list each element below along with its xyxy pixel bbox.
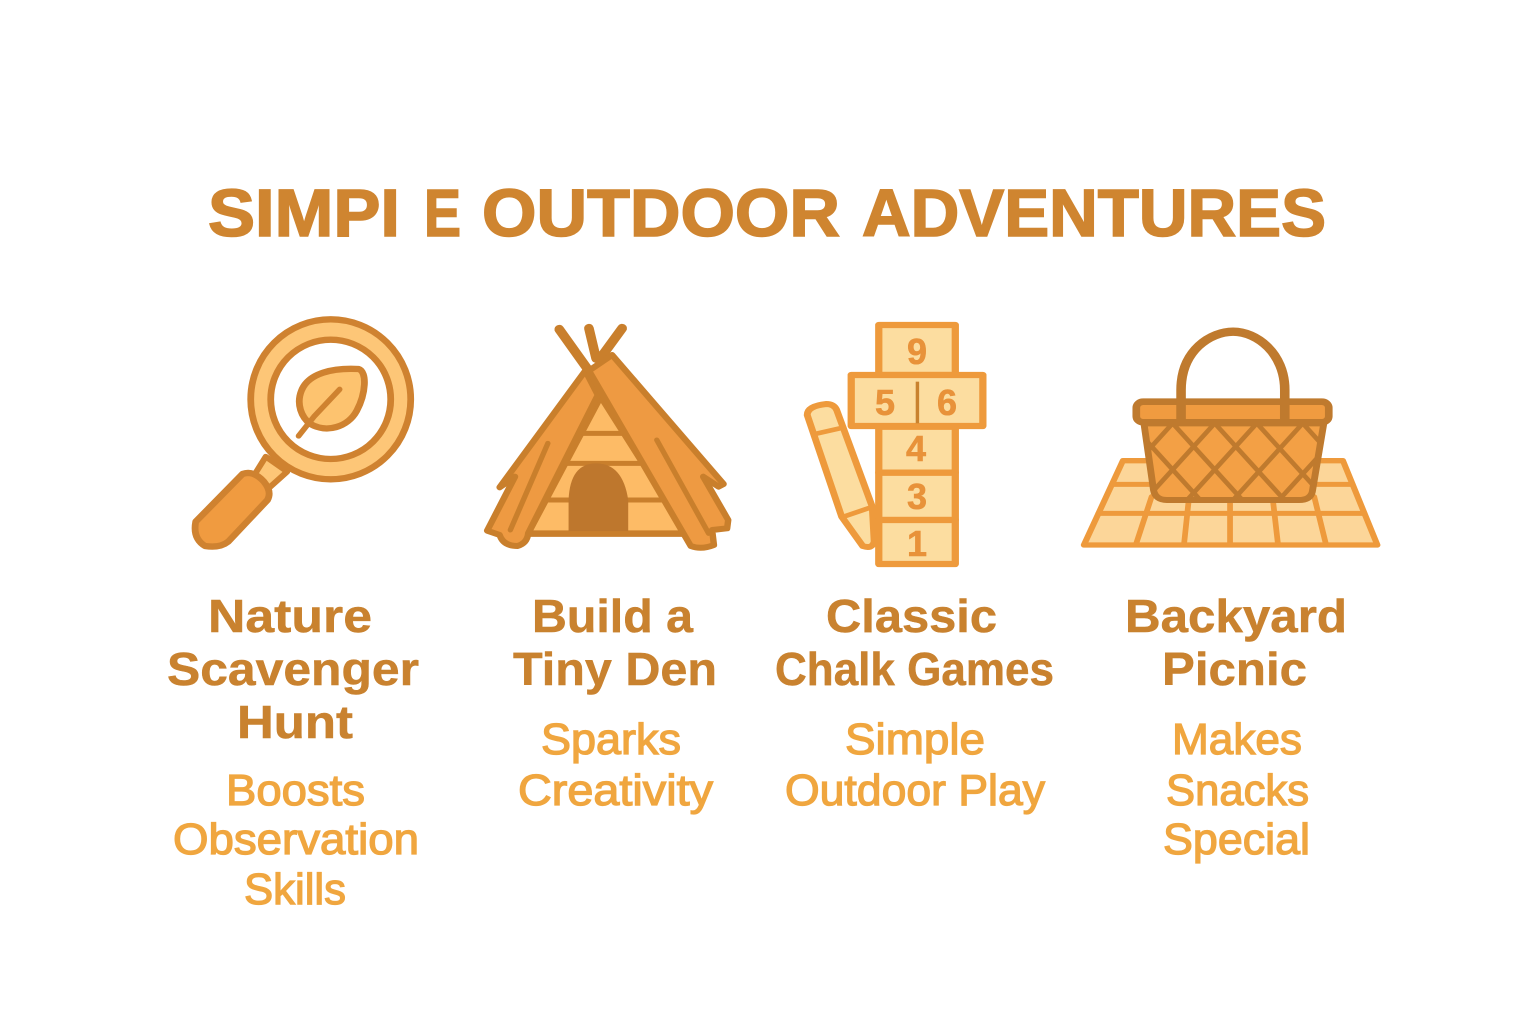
column 3 heading: Chalk Games <box>775 643 1054 695</box>
column 1 benefit: Skills <box>244 865 346 914</box>
column 3 heading <box>775 590 1054 695</box>
column 1 heading <box>167 590 419 748</box>
column 3 benefit <box>785 715 1045 815</box>
column 4 benefit: Makes <box>1172 715 1302 764</box>
column 4 heading: Backyard <box>1125 590 1347 642</box>
column 1 benefit <box>173 766 419 914</box>
column 2 benefit: Creativity <box>518 766 713 815</box>
column 1 benefit: Boosts <box>226 766 365 815</box>
icon: magnifying glass with leaf <box>195 319 411 547</box>
title: ADVENTURES <box>862 176 1326 251</box>
column 4 benefit: Snacks <box>1166 766 1309 815</box>
column 2 benefit <box>518 715 713 815</box>
picnic blanket <box>1084 461 1377 545</box>
title: E <box>424 176 461 251</box>
hopscotch numbers: 5 <box>875 382 895 423</box>
title <box>208 176 1326 251</box>
column 3 heading: Classic <box>826 590 997 642</box>
icon: picnic basket on blanket <box>1084 332 1391 545</box>
title: SIMPI <box>208 176 400 251</box>
column 2 heading: Tiny Den <box>513 643 717 695</box>
hopscotch numbers: 4 <box>906 428 926 469</box>
column 3 benefit: Outdoor Play <box>785 766 1045 815</box>
basket <box>1132 328 1333 503</box>
column 1 heading: Scavenger <box>167 643 419 695</box>
column 2 heading: Build a <box>532 590 693 642</box>
title: OUTDOOR <box>482 176 840 251</box>
hopscotch grid <box>851 325 983 564</box>
hopscotch numbers: 3 <box>907 476 927 517</box>
hopscotch numbers <box>875 331 957 564</box>
icon: hopscotch and chalk <box>807 325 983 564</box>
column 3 benefit: Simple <box>845 715 985 764</box>
column 4 heading: Picnic <box>1162 643 1307 695</box>
column 1 heading: Nature <box>208 590 372 642</box>
column 2 heading <box>513 590 717 695</box>
column 1 heading: Hunt <box>237 696 353 748</box>
icon: tiny den hut <box>487 328 728 548</box>
hopscotch numbers: 6 <box>937 382 957 423</box>
hopscotch numbers: 9 <box>907 331 927 372</box>
column 4 heading <box>1125 590 1347 695</box>
column 2 benefit: Sparks <box>541 715 681 764</box>
column 4 benefit: Special <box>1163 815 1310 864</box>
column 1 benefit: Observation <box>173 815 419 864</box>
chalk stick <box>807 404 874 547</box>
hopscotch numbers: 1 <box>907 523 927 564</box>
column 4 benefit <box>1163 715 1310 864</box>
